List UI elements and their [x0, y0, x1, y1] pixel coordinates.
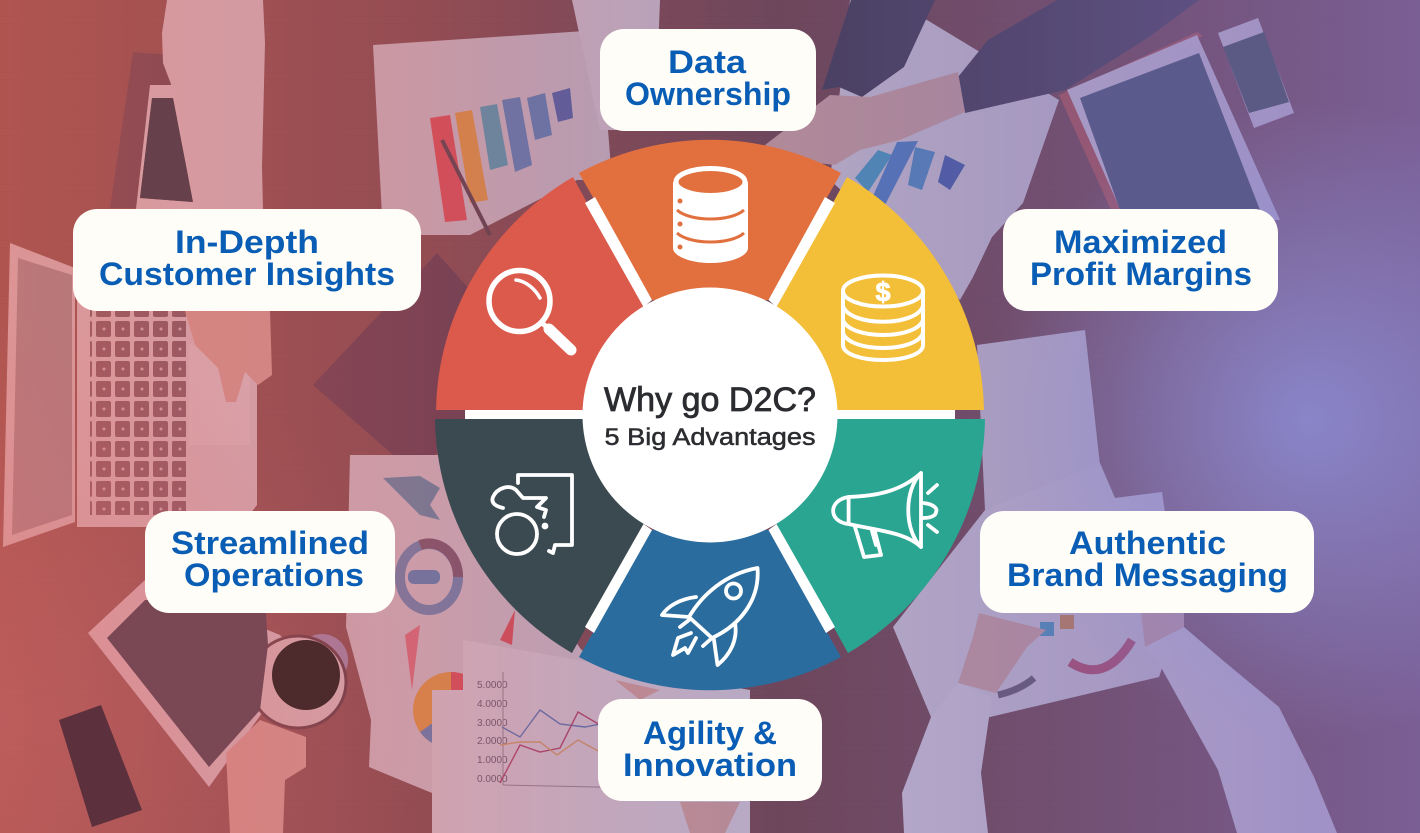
line chart axis labels: 3.0000 [477, 718, 508, 729]
top centre sleeve [572, 0, 660, 130]
icon: rocket [662, 568, 758, 665]
icon: streamlined operations pieces [492, 475, 572, 554]
sleeves bottom right [902, 683, 992, 833]
papers bottom centre [346, 455, 700, 833]
segment: streamlined operations [435, 419, 644, 653]
saucer [296, 634, 348, 686]
handshake [765, 72, 965, 165]
callout: in-depth customer insights: Customer Insights [99, 256, 395, 292]
callout: in-depth customer insights [73, 209, 421, 311]
icon: coins with dollar sign: $ [875, 277, 891, 307]
callout: streamlined operations: Operations [184, 557, 364, 593]
phone top left [136, 85, 195, 209]
notebook behind phone [110, 52, 175, 208]
folder right [977, 330, 1100, 510]
line chart axis labels: 2.0000 [477, 736, 508, 747]
line chart axis labels: 1.0000 [477, 755, 508, 766]
callout: maximized profit margins: Profit Margins [1030, 256, 1252, 292]
segment: agility and innovation [579, 530, 841, 690]
segment: authentic brand messaging [776, 419, 985, 653]
callout: data ownership: Data [668, 44, 746, 80]
tablet top right [1059, 32, 1203, 220]
segment: maximized profit margins [776, 177, 984, 410]
icon: database [673, 168, 748, 263]
hub title: Why go D2C? [604, 381, 816, 419]
sleeve top left [162, 0, 265, 209]
segment: in-depth customer insights [436, 177, 644, 410]
callout: agility and innovation: Innovation [623, 747, 797, 783]
cup [250, 636, 346, 728]
hand on trackpad [185, 311, 272, 402]
callout: agility and innovation [598, 699, 822, 801]
callout: streamlined operations [145, 511, 395, 613]
callout: data ownership: Ownership [625, 76, 791, 112]
callout: maximized profit margins: Maximized [1054, 224, 1227, 260]
laptop [3, 243, 75, 547]
hub subtitle: 5 Big Advantages [604, 424, 816, 451]
centre hub [582, 288, 838, 542]
icon: magnifying glass [489, 270, 571, 350]
callout: data ownership [600, 29, 816, 131]
bottom centre hand [615, 680, 740, 833]
segment: data ownership [579, 140, 841, 300]
phone top right [1218, 18, 1294, 128]
callout: authentic brand messaging: Brand Messaging [1007, 557, 1288, 593]
bottom right paper [893, 463, 1180, 717]
line chart axis labels: 4.0000 [477, 699, 508, 710]
callout: maximized profit margins [1003, 209, 1278, 311]
wheel: six advantage segments [435, 140, 985, 690]
hands bottom right [958, 613, 1046, 693]
icon: coins with dollar sign [843, 276, 923, 360]
dark book [313, 253, 470, 474]
top paper with bar chart [373, 30, 612, 235]
line chart axis labels [477, 680, 508, 785]
callout: authentic brand messaging: Authentic [1069, 525, 1226, 561]
callout: in-depth customer insights: In-Depth [175, 224, 319, 260]
callout: agility and innovation: Agility & [643, 715, 777, 751]
right paper with bars [830, 0, 1059, 300]
callout: streamlined operations: Streamlined [171, 525, 369, 561]
dark sleeves [822, 0, 935, 97]
bottom left tablet [88, 580, 300, 787]
icon: megaphone [833, 473, 937, 557]
hand with cup [226, 720, 306, 833]
line chart axis labels: 5.0000 [477, 680, 508, 691]
callout: authentic brand messaging [980, 511, 1314, 613]
line chart axis labels: 0.0000 [477, 774, 508, 785]
